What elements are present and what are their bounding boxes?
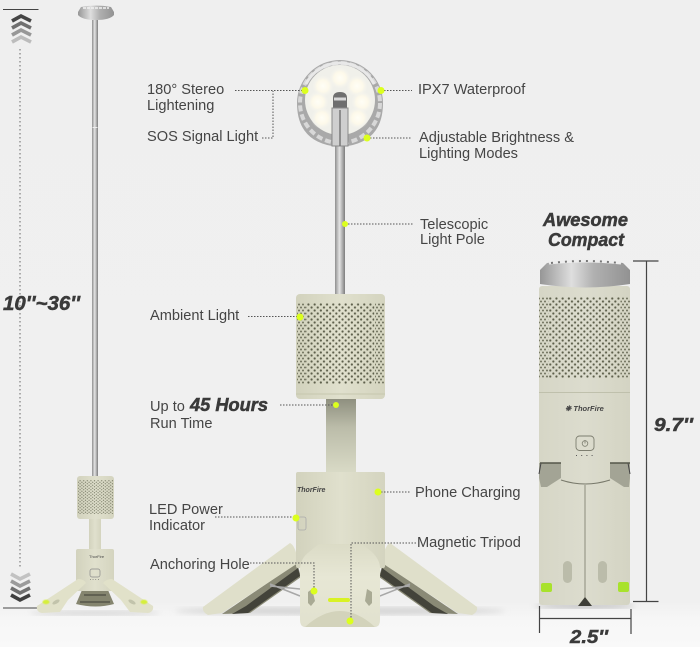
callout: anchoring hole: Anchoring Hole [150,557,250,573]
tripod legs [203,543,477,615]
extended lamp (left) [37,6,153,613]
callout: 45 hours run time: 45 Hours [189,395,268,415]
heading [542,210,628,250]
callout: telescopic light pole: Light Pole [420,232,485,248]
extended lamp (left): ThorFire [89,554,105,559]
charging base: ThorFire [297,487,325,494]
callout: SOS signal light [147,91,273,145]
dimension: 2.5 inches [540,606,631,647]
callout: phone charging: Phone Charging [415,485,520,501]
callout: IPX7 waterproof: IPX7 Waterproof [418,82,526,98]
lamp head [297,60,383,146]
logo: ❋ ThorFire [565,404,604,413]
body [539,286,630,605]
callout: LED power indicator: LED Power [149,502,223,518]
heading: Awesome [542,210,628,230]
callout: 180 stereo lightening: Lightening [147,98,214,114]
callout: 45 hours run time: Up to [150,399,185,415]
lamp head [78,6,114,20]
callout: LED power indicator: Indicator [149,518,205,534]
callout: 180 stereo lightening [147,82,308,114]
dimension: 9.7 inches [633,261,694,602]
compact product (right) [539,210,630,606]
front leg [300,544,380,627]
callout: 45 hours run time [150,395,339,432]
heading: Compact [548,230,625,250]
callout: 45 hours run time: Run Time [150,416,212,432]
charging base [296,472,385,568]
callout: adjustable brightness: Lighting Modes [419,146,518,162]
callout: SOS signal light: SOS Signal Light [147,129,258,145]
silver head [540,260,630,288]
callout: ambient light [150,308,304,324]
speaker grille [539,297,630,378]
dimension: 9.7 inches: 9.7'' [654,415,694,435]
callout: 180 stereo lightening: 180° Stereo [147,82,224,98]
power button [576,436,594,456]
height dimension: 10 to 36 inches [3,10,81,608]
tripod legs [37,579,86,613]
up chevrons [12,16,31,42]
callout: magnetic tripod [346,535,521,624]
callout: telescopic light pole [342,217,488,248]
callout: ambient light: Ambient Light [150,308,239,324]
dimension: 2.5 inches: 2.5'' [569,627,609,647]
telescopic pole [335,140,345,295]
ambient light cylinder [296,294,385,474]
callout: anchoring hole [150,557,318,594]
folded legs [539,463,630,606]
main lamp (center) [203,60,477,627]
callout: adjustable brightness [364,130,574,162]
callout: telescopic light pole: Telescopic [420,217,488,233]
callout: magnetic tripod: Magnetic Tripod [417,535,521,551]
height label: 10''~36'' [3,293,81,315]
head bracket [333,92,347,146]
callout: LED power indicator [149,502,300,534]
callout: adjustable brightness: Adjustable Brightness & [419,130,574,146]
down chevrons [11,574,30,600]
